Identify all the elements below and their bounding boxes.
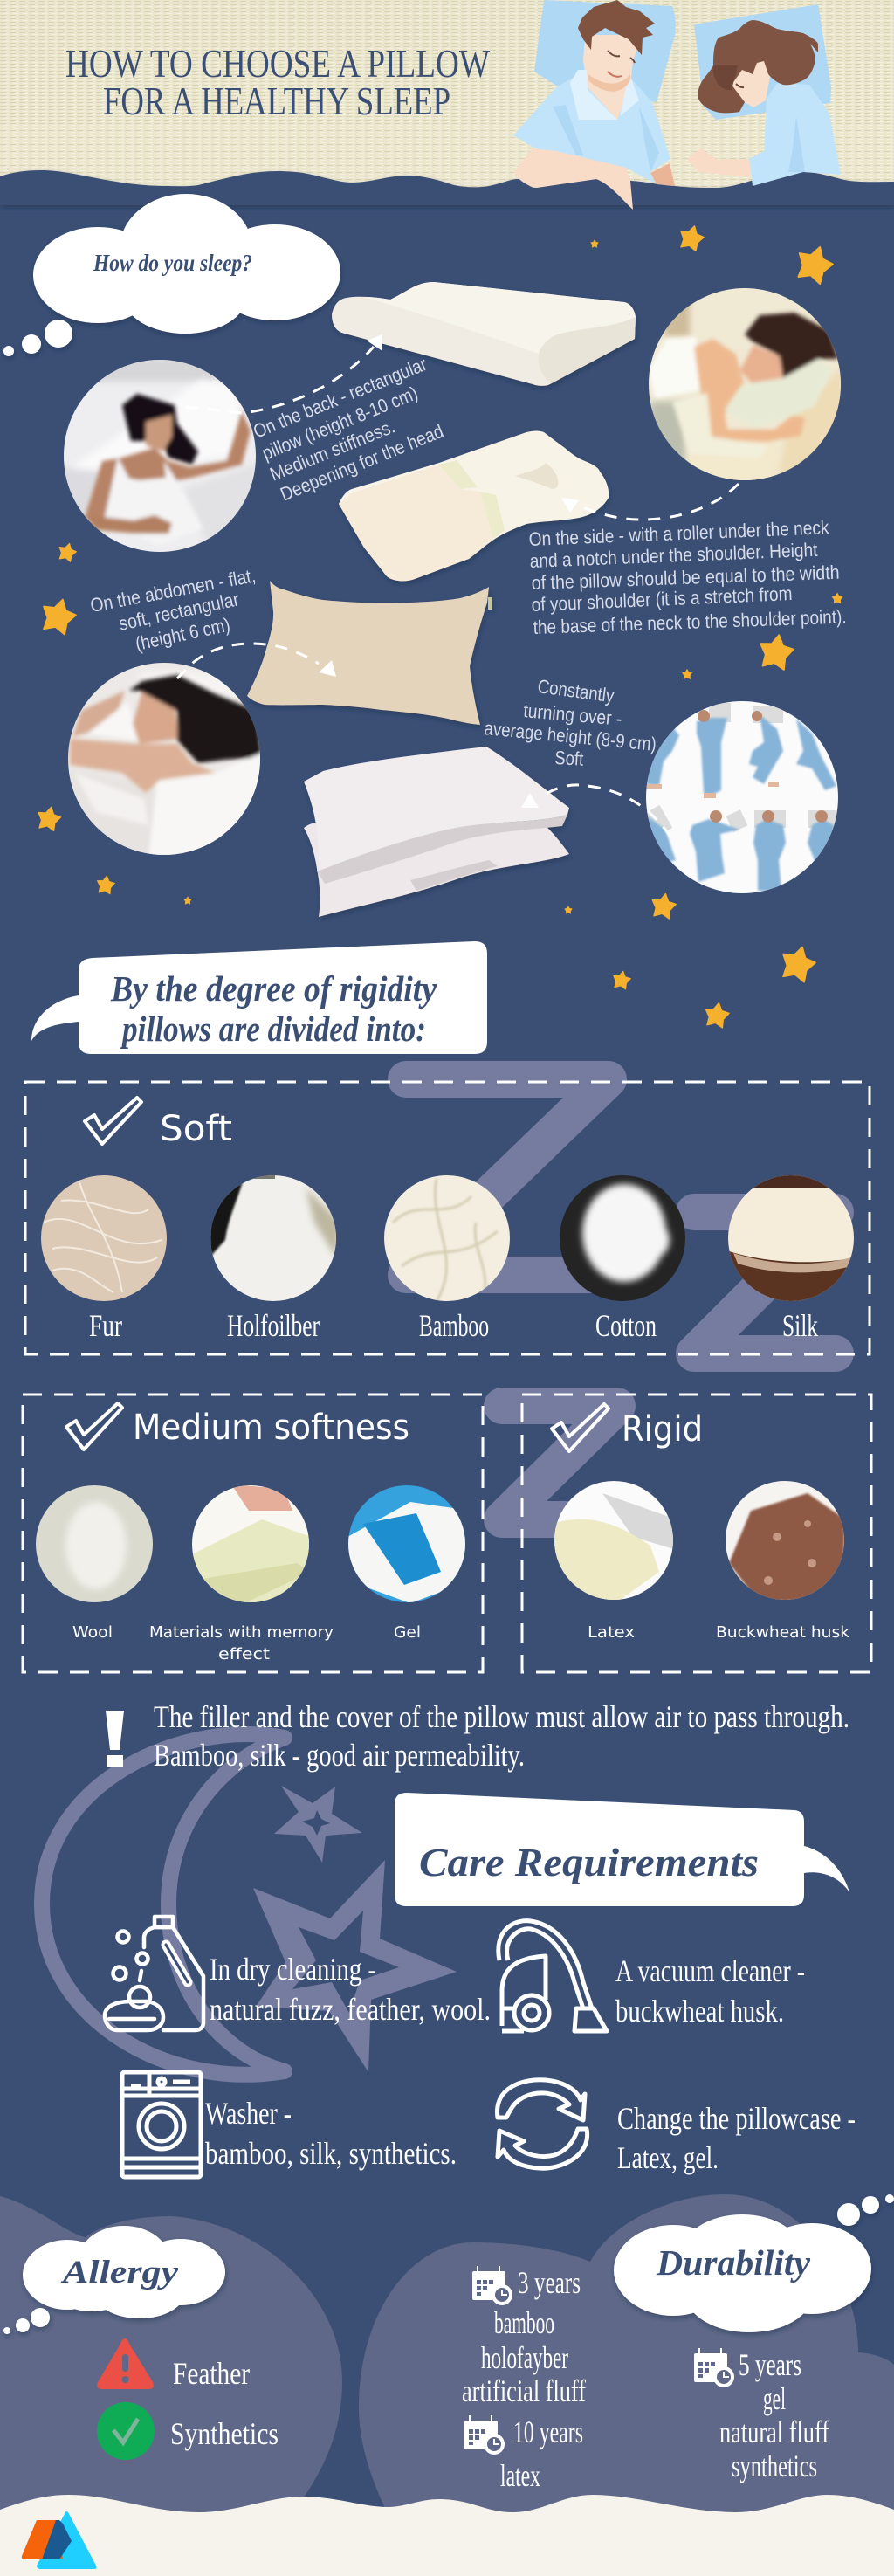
text: on the side	[528, 516, 847, 638]
label: bamboo: Bamboo	[419, 1308, 489, 1343]
text block: 5 years: natural fluff	[719, 2414, 829, 2449]
icon: calendar clock 5 years	[694, 2348, 734, 2387]
photo: sleeping on the back	[61, 358, 258, 555]
logo	[22, 2511, 97, 2569]
icon: detergent bottle	[105, 1917, 203, 2030]
text: on the abdomen: On the abdomen - flat,	[88, 564, 258, 616]
photo: memory foam	[192, 1484, 311, 1603]
text: constantly turning over	[484, 675, 657, 770]
man's pillow	[534, 0, 676, 102]
arrow: stomach sleeper to pillow	[177, 644, 336, 678]
photo: turning over, blue pyjama figures	[642, 699, 842, 896]
icon: check mark	[552, 1404, 609, 1451]
text block: 3 years: artificial fluff	[462, 2373, 586, 2408]
text block: 10 years: 10 years	[513, 2414, 583, 2449]
icon: washing machine	[122, 2072, 201, 2177]
thought cloud: allergy	[3, 2226, 225, 2334]
text: constantly turning over: turning over -	[523, 699, 622, 730]
callout: degree of rigidity: pillows are divided into:	[120, 1009, 426, 1049]
text block: dry cleaning	[210, 1952, 491, 2027]
woman's pillow	[694, 4, 831, 120]
text block: vacuum: buckwheat husk.	[615, 1994, 784, 2028]
pillow: contoured, for side sleepers	[339, 431, 609, 581]
photo: cotton	[559, 1174, 688, 1303]
text block: dry cleaning: natural fuzz, feather, wool.	[210, 1992, 491, 2027]
icon: green check	[97, 2402, 155, 2460]
thought cloud: durability: Durability	[656, 2242, 811, 2283]
text block: 10 years: latex	[500, 2458, 540, 2493]
text: on the back	[251, 353, 446, 506]
callout: degree of rigidity	[31, 941, 487, 1054]
footer band with wave	[0, 2495, 894, 2576]
text block: 3 years	[462, 2265, 586, 2408]
text block: pillowcase: Latex, gel.	[617, 2140, 719, 2175]
label: buckwheat husk: Buckwheat husk	[716, 1623, 850, 1642]
arrow: side sleeper to pillow	[561, 484, 739, 520]
text block: 5 years: gel	[763, 2381, 786, 2416]
photo: latex pillow	[552, 1479, 677, 1603]
panel: medium softness	[23, 1395, 483, 1672]
text: constantly turning over: Constantly	[536, 675, 615, 706]
icon: check mark	[85, 1098, 141, 1144]
photo: silk	[726, 1174, 856, 1303]
thought cloud: how do you sleep: How do you sleep?	[93, 250, 252, 276]
heading: rigid: Rigid	[622, 1409, 703, 1450]
header texture band	[0, 0, 894, 205]
text: on the back: Deepening for the head	[278, 420, 446, 506]
label: hollofiber: Holfoilber	[227, 1308, 320, 1343]
text block: vacuum: A vacuum cleaner -	[615, 1953, 805, 1988]
text block: 5 years: 5 years	[739, 2347, 801, 2382]
label: wool: Wool	[72, 1623, 113, 1642]
background motif: stars	[36, 223, 842, 1029]
photo: sleeping on the abdomen	[65, 659, 265, 860]
background motif: outline stars	[253, 1786, 457, 2072]
text block: 3 years: 3 years	[518, 2265, 581, 2300]
text: on the abdomen: (height 6 cm)	[134, 614, 232, 655]
text: constantly turning over: average height (8-9 cm)	[484, 717, 657, 755]
icon: vacuum cleaner	[499, 1921, 607, 2031]
text block: pillowcase	[617, 2101, 856, 2175]
label: feather: Feather	[173, 2356, 250, 2391]
background motif: Z letters	[406, 1079, 836, 1519]
panel: soft	[25, 1082, 870, 1354]
label: gel: Gel	[394, 1623, 421, 1642]
thought cloud: how do you sleep	[3, 194, 340, 356]
title	[65, 41, 490, 123]
panel: rigid	[522, 1395, 871, 1672]
icon: calendar clock 10 years	[464, 2415, 505, 2455]
icon: calendar clock 3 years	[472, 2266, 512, 2305]
text: on the back: On the back - rectangular	[251, 353, 430, 443]
text: on the back: pillow (height 8-10 cm)	[259, 382, 421, 465]
text: on the side: of your shoulder (it is a stretch from	[531, 582, 793, 616]
text block: washer: bamboo, silk, synthetics.	[205, 2136, 457, 2171]
pillow: flat beige, for stomach sleepers	[247, 581, 492, 725]
text: constantly turning over: Soft	[554, 747, 584, 770]
illustration: sleeping couple	[513, 0, 841, 210]
text: on the side: the base of the neck to the shoulder point).	[533, 605, 847, 638]
pillows: two white stacked	[304, 747, 569, 917]
arrow: back sleeper to pillow	[186, 334, 382, 413]
heading: medium softness: Medium softness	[133, 1408, 409, 1448]
title: HOW TO CHOOSE A PILLOW	[65, 41, 490, 86]
photo: buckwheat husk	[723, 1479, 847, 1603]
photo: bamboo	[382, 1174, 512, 1303]
background motif: crescent moon	[42, 1734, 285, 2075]
text block: dry cleaning: In dry cleaning -	[210, 1952, 376, 1987]
text block: 10 years	[500, 2414, 583, 2493]
text block: washer: Washer -	[205, 2096, 292, 2131]
label: fur: Fur	[89, 1308, 122, 1343]
heading: soft: Soft	[160, 1109, 232, 1149]
thought cloud: durability	[614, 2194, 894, 2332]
photo: sleeping on the side	[646, 284, 843, 485]
callout: care requirements: Care Requirements	[419, 1840, 759, 1884]
photo: fur	[39, 1174, 168, 1303]
label: silk: Silk	[782, 1308, 818, 1343]
text: on the abdomen	[88, 564, 258, 655]
panel background: durability cloud	[359, 2194, 894, 2515]
callout: care requirements	[395, 1793, 849, 1906]
label: memory foam: Materials with memory	[149, 1623, 334, 1642]
callout: air permeability	[106, 1699, 849, 1773]
text: on the side: On the side - with a roller under the neck	[528, 516, 830, 550]
text: on the back: Medium stiffness.	[267, 416, 398, 486]
text: on the abdomen: soft, rectangular	[117, 588, 241, 635]
text block: vacuum	[615, 1953, 805, 2028]
text block: 5 years	[719, 2347, 829, 2483]
pillow: ergonomic, for back sleepers	[332, 282, 636, 386]
icon: warning triangle	[97, 2338, 154, 2389]
text: on the side: of the pillow should be equal to the width	[531, 561, 840, 594]
thought cloud: allergy: Allergy	[61, 2255, 179, 2290]
title: FOR A HEALTHY SLEEP	[103, 79, 450, 123]
label: cotton: Cotton	[595, 1308, 657, 1343]
man: arm, shirt and head	[513, 0, 675, 210]
panel background: allergy cloud	[0, 2196, 342, 2515]
text: on the side: and a notch under the shoulder. Height	[529, 539, 818, 572]
photo: hollofiber	[210, 1174, 340, 1303]
icon: exclamation mark	[106, 1711, 124, 1767]
text block: air permeability: Bamboo, silk - good air permeability.	[154, 1738, 525, 1773]
text block: washer	[205, 2096, 457, 2171]
callout: degree of rigidity: By the degree of rigidity	[110, 968, 437, 1009]
text block: 3 years: holofayber	[481, 2340, 568, 2375]
label: latex: Latex	[588, 1623, 635, 1642]
photo: wool	[35, 1484, 154, 1603]
photo: gel pillow	[347, 1484, 471, 1603]
icon: check mark	[66, 1403, 122, 1450]
woman: hand, shirt and hair	[687, 20, 841, 186]
text block: air permeability	[154, 1699, 849, 1773]
label: memory foam: effect	[218, 1645, 270, 1663]
icon: circular arrows	[498, 2080, 588, 2168]
label: memory foam	[149, 1623, 334, 1663]
arrow: restless sleeper to pillow	[521, 785, 670, 837]
text block: 5 years: synthetics	[732, 2449, 817, 2483]
text block: 3 years: bamboo	[494, 2305, 554, 2340]
label: synthetics: Synthetics	[170, 2416, 279, 2451]
